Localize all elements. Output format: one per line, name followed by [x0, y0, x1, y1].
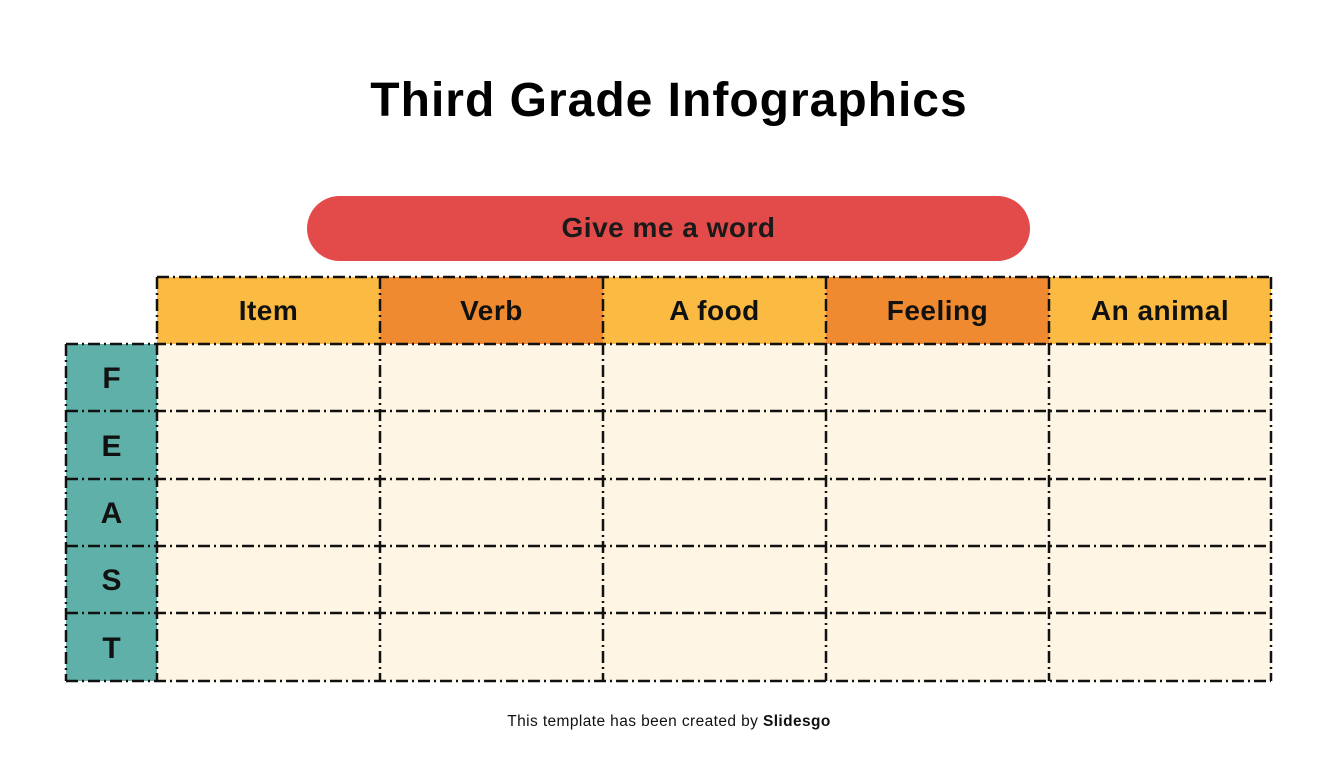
title: Third Grade Infographics	[370, 74, 968, 127]
letter column: S	[101, 564, 122, 597]
table	[66, 277, 1271, 681]
header row: An animal	[1091, 295, 1229, 326]
header row: A food	[669, 295, 760, 326]
body cells	[157, 344, 1271, 681]
letter column: A	[101, 497, 122, 530]
header row: Verb	[460, 295, 523, 326]
header row: Feeling	[887, 295, 988, 326]
header row: Item	[239, 295, 298, 326]
footer credit: This template has been created by Slidesgo	[507, 713, 831, 730]
letter column	[66, 344, 157, 681]
pill: give me a word: Give me a word	[562, 212, 775, 243]
letter column: T	[102, 632, 121, 665]
pill: give me a word	[307, 196, 1030, 261]
letter column: F	[102, 362, 121, 395]
header row	[157, 277, 1271, 344]
letter column: E	[101, 430, 122, 463]
